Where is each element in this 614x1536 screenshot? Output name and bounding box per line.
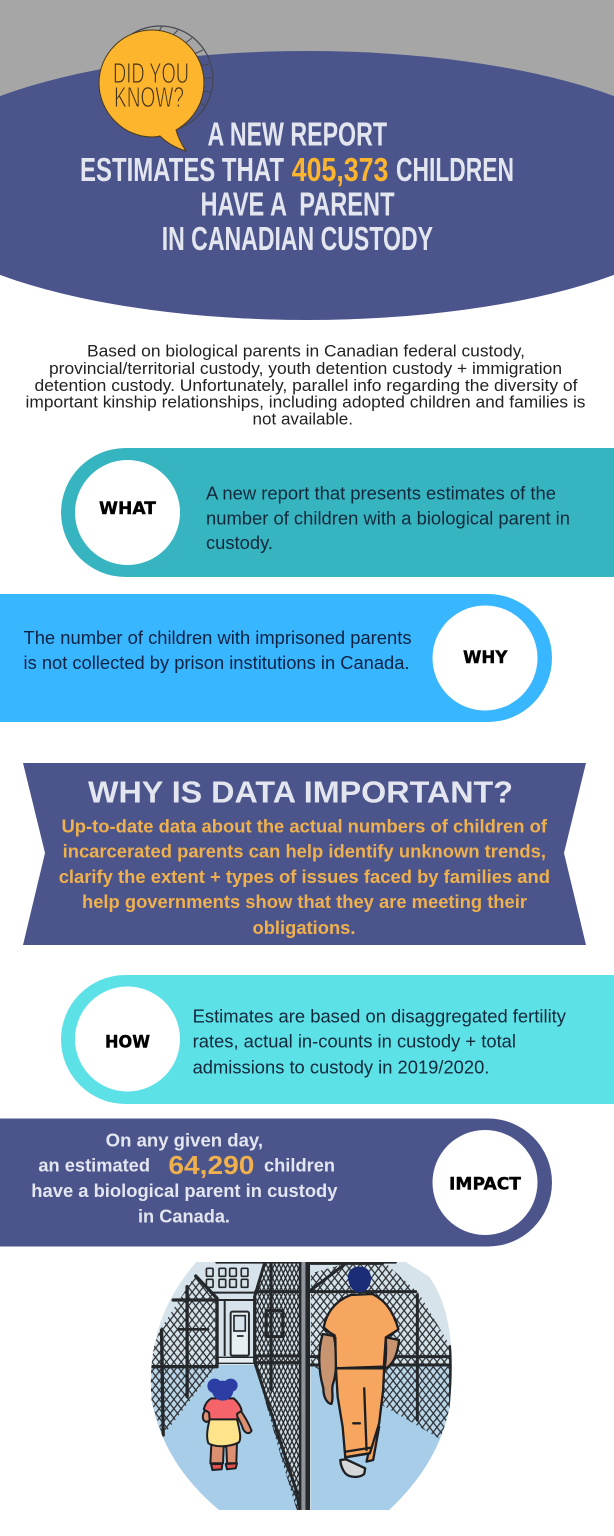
panel: why — [0, 594, 552, 722]
intro text block: important kinship relationships, including adopted children and families is — [26, 393, 586, 412]
what text: A new report that presents estimates of the — [206, 482, 556, 503]
how badge — [75, 986, 180, 1092]
child figure — [203, 1379, 252, 1470]
banner text: Up-to-date data about the actual numbers of children of — [62, 815, 548, 836]
icon: did you know speech bubble: KNOW? — [114, 82, 184, 114]
parent figure — [319, 1267, 399, 1477]
fences — [150, 1276, 217, 1437]
how text: admissions to custody in 2019/2020. — [193, 1056, 489, 1077]
panel: what — [61, 448, 614, 577]
panel: how — [61, 975, 614, 1104]
building windows and door — [206, 1268, 256, 1363]
what text — [206, 482, 570, 553]
why text: is not collected by prison institutions in Canada. — [24, 652, 410, 673]
impact text: have a biological parent in custody — [31, 1180, 338, 1201]
why text — [24, 627, 412, 673]
why text: The number of children with imprisoned parents — [24, 627, 412, 648]
title: A NEW REPORT — [208, 117, 387, 154]
panel: why is data important banner — [23, 763, 586, 945]
what badge — [75, 460, 180, 565]
impact badge — [432, 1130, 538, 1235]
intro text block — [26, 342, 586, 428]
what badge: WHAT — [99, 499, 156, 519]
banner heading: WHY IS DATA IMPORTANT? — [88, 775, 513, 810]
impact text — [31, 1130, 338, 1227]
title — [80, 117, 514, 258]
header ellipse — [0, 51, 614, 320]
intro text block: Based on biological parents in Canadian federal custody, — [87, 342, 525, 361]
panel: impact — [0, 1118, 552, 1246]
impact text: On any given day, — [106, 1130, 263, 1151]
banner text: help governments show that they are meeting their — [82, 891, 527, 912]
impact text: 64,290 — [168, 1150, 254, 1180]
impact badge: IMPACT — [449, 1174, 521, 1194]
icon: did you know speech bubble: DID YOU — [113, 58, 189, 90]
banner text: incarcerated parents can help identify unknown trends, — [63, 841, 546, 862]
title: CHILDREN — [396, 152, 514, 189]
header background: gray — [0, 0, 614, 186]
what text: custody. — [206, 532, 273, 553]
illustration: child and parent walking through prison fences — [150, 1262, 452, 1510]
intro text block: not available. — [252, 409, 353, 428]
impact text: in Canada. — [138, 1206, 230, 1227]
how badge: HOW — [105, 1033, 150, 1053]
icon: did you know speech bubble — [99, 26, 213, 151]
what text: number of children with a biological parent in — [206, 507, 570, 528]
banner text — [59, 815, 550, 938]
how text: Estimates are based on disaggregated fertility — [193, 1006, 567, 1027]
title: IN CANADIAN CUSTODY — [162, 221, 433, 258]
intro text block: detention custody. Unfortunately, parallel info regarding the diversity of — [34, 376, 578, 395]
banner text: clarify the extent + types of issues faced by families and — [59, 866, 550, 887]
how text — [193, 1006, 567, 1077]
intro text block: provincial/territorial custody, youth detention custody + immigration — [49, 359, 562, 378]
impact text: children — [264, 1155, 335, 1176]
how text: rates, actual in-counts in custody + total — [193, 1031, 516, 1052]
title: HAVE A PARENT — [200, 186, 395, 224]
why badge — [432, 606, 538, 710]
title: ESTIMATES THAT — [80, 152, 284, 189]
title: 405,373 — [292, 152, 388, 189]
center post — [301, 1262, 305, 1510]
impact text: an estimated — [38, 1155, 150, 1176]
why badge: WHY — [463, 648, 508, 668]
banner text: obligations. — [252, 917, 356, 938]
